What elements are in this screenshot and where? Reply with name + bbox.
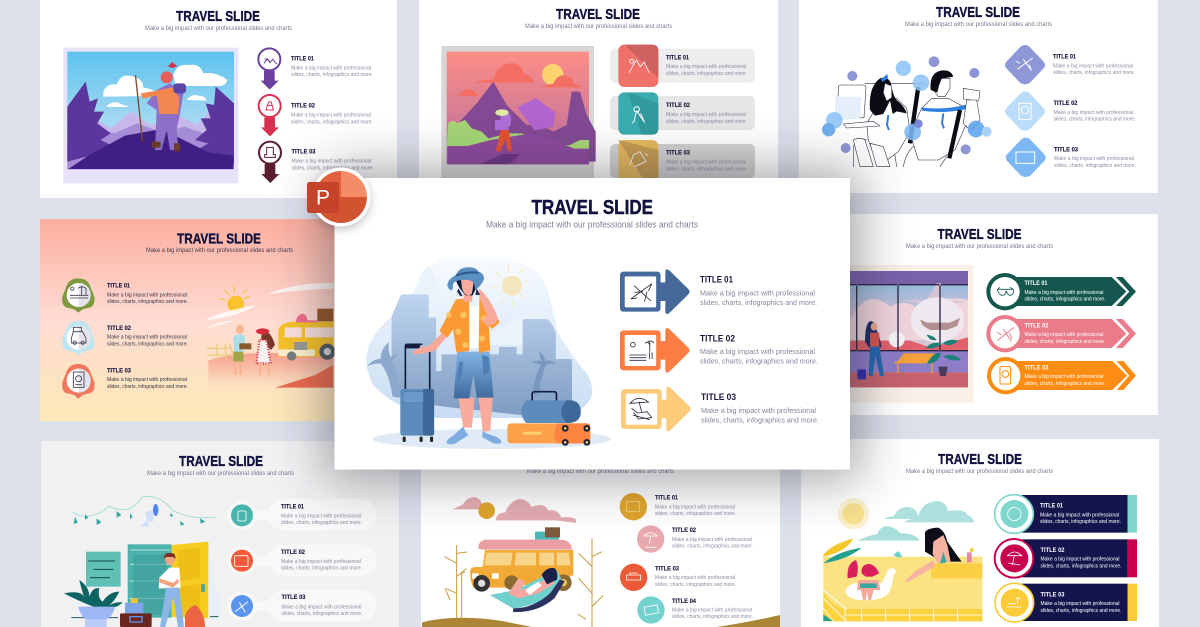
icons: arrow signs: [620, 269, 691, 431]
illustration: couple by van in the sun: [207, 283, 335, 388]
text: body 02: slides, charts, infographics and more.: [1054, 116, 1136, 122]
text: title 03: TITLE 03: [292, 148, 316, 156]
text: title 02: TITLE 02: [1024, 322, 1049, 330]
text: body 02: Make a big impact with professional: [666, 112, 746, 118]
subtitle: Make a big impact with our professional slides and charts: [146, 248, 293, 254]
heading: TRAVEL SLIDE: [556, 7, 640, 23]
text: body 01: [107, 292, 188, 305]
illustration: room with door, plant and person: [64, 496, 222, 627]
heading: TRAVEL SLIDE: [938, 227, 1022, 243]
text: body 03: [666, 160, 747, 172]
city skyline: [392, 294, 572, 415]
text: body 02: slides, charts, infographics and more.: [291, 120, 373, 126]
text: body 01: Make a big impact with professional: [1024, 290, 1104, 296]
ground shadow: [372, 429, 611, 449]
text: body 04: Make a big impact with professional: [672, 608, 752, 614]
text: title 02: TITLE 02: [672, 527, 696, 534]
text: body 01: slides, charts, infographics and more.: [291, 72, 373, 78]
text: title 01: TITLE 01: [666, 54, 689, 62]
text: title 01: TITLE 01: [655, 494, 678, 502]
text: body 02: [672, 537, 753, 550]
arrow banners: [986, 273, 1136, 394]
text: title 02: TITLE 02: [1040, 547, 1065, 554]
palm right: [531, 351, 557, 395]
text: body 02: [666, 112, 747, 125]
text: title 02: TITLE 02: [107, 325, 131, 332]
text: title 02: TITLE 02: [281, 549, 305, 556]
sun: [491, 265, 529, 307]
text: body 03: slides, charts, infographics and more.: [655, 582, 736, 588]
text: body 02: Make a big impact with professional: [281, 559, 361, 565]
illustration: airport window with plane: [843, 265, 973, 403]
text: title 01: TITLE 01: [281, 504, 304, 510]
subtitle: Make a big impact with our professional slides and charts: [905, 22, 1052, 28]
text: body 03: [1054, 156, 1136, 169]
text: body 03: slides, charts, infographics and more.: [1054, 163, 1136, 169]
main heading: TRAVEL SLIDE: [532, 197, 653, 219]
text: title 02: TITLE 02: [700, 334, 735, 344]
text: body 03: [282, 604, 362, 617]
text: body 03: [1024, 374, 1106, 387]
sign 2: beach: [620, 328, 690, 373]
text: body 03: [655, 575, 736, 588]
text: body 02: Make a big impact with professional: [1040, 556, 1120, 562]
sign 1: plane: [620, 269, 690, 314]
text: title 03: TITLE 03: [701, 392, 736, 402]
text: body 01: Make a big impact with professional: [700, 288, 815, 298]
heading: TRAVEL SLIDE: [936, 5, 1020, 21]
text: body 02: [700, 347, 818, 366]
text: body 01: [281, 514, 362, 526]
icon: PowerPoint logo: [307, 168, 370, 229]
illustration: van with sunbather and trees: [422, 497, 780, 627]
text: body 03: [107, 377, 188, 390]
illustration: walker with mountains and sunset: [441, 46, 596, 181]
text: title 01: TITLE 01: [1053, 54, 1076, 60]
text: body 01: [1024, 290, 1106, 302]
text: title 02: TITLE 02: [291, 102, 315, 110]
text: title 03: TITLE 03: [1024, 364, 1049, 372]
text: body 03: Make a big impact with professional: [701, 406, 816, 415]
text: title 03: TITLE 03: [1040, 592, 1065, 598]
illustration: hiker in purple mountains: [63, 48, 238, 183]
sign 3: umbrella: [621, 387, 691, 431]
text: body 02: [281, 559, 362, 572]
text: body 02: [107, 334, 188, 348]
text: body 03: [1040, 601, 1122, 614]
text: body 02: Make a big impact with professional: [1024, 332, 1104, 338]
text: body 01: slides, charts, infographics and more.: [1024, 296, 1106, 302]
text: body 03: slides, charts, infographics and more.: [666, 166, 747, 172]
text: body 01: Make a big impact with professional: [666, 64, 746, 70]
icon: PowerPoint logo: P: [316, 186, 330, 210]
main slide shadow: [325, 170, 860, 480]
illustration: pool with swimmers: [823, 498, 982, 622]
text: body 02: Make a big impact with professional: [107, 334, 187, 340]
panel: bottom-left slide: [41, 441, 399, 627]
text: body 01: [291, 66, 373, 78]
text: title 02: TITLE 02: [666, 102, 690, 109]
text: body 01: slides, charts, infographics and more.: [700, 298, 817, 307]
text: body 03: slides, charts, infographics and more.: [282, 611, 362, 617]
text: body 01: Make a big impact with professional: [281, 514, 361, 520]
text: body 03: [701, 406, 819, 424]
text: body 02: [1040, 556, 1122, 570]
text: title 03: TITLE 03: [282, 594, 306, 601]
list: circle arrow icons: [258, 48, 281, 183]
panel: main centre slide: [334, 178, 850, 470]
text: body 01: [1053, 64, 1135, 76]
text: title 01: TITLE 01: [700, 274, 733, 284]
text: body 02: slides, charts, infographics and more.: [1040, 564, 1122, 570]
text: title 01: TITLE 01: [291, 56, 314, 62]
text: body 03: Make a big impact with professional: [655, 575, 735, 581]
subtitle: Make a big impact with our professional slides and charts: [906, 469, 1053, 475]
text: body 03: slides, charts, infographics and more.: [1024, 381, 1106, 387]
list: navy bars with ring circles: [995, 495, 1137, 622]
text: body 01: slides, charts, infographics and more.: [281, 520, 362, 526]
text: body 01: [666, 64, 747, 77]
text: body 03: slides, charts, infographics and more.: [107, 384, 188, 390]
text: body 02: Make a big impact with professional: [291, 112, 371, 118]
panel: middle-right slide: [843, 214, 1158, 415]
text: body 01: slides, charts, infographics and more.: [1053, 70, 1135, 76]
text: body 04: [672, 608, 753, 620]
text: body 01: slides, charts, infographics and more.: [1040, 519, 1121, 525]
text: body 03: Make a big impact with professional: [1024, 374, 1104, 380]
text: body 03: slides, charts, infographics and more.: [1040, 608, 1122, 614]
text: body 02: slides, charts, infographics and more.: [1024, 339, 1106, 345]
text: body 02: slides, charts, infographics and more.: [107, 342, 188, 348]
text: body 02: slides, charts, infographics and more.: [672, 544, 753, 550]
text: body 03: Make a big impact with professional: [1040, 601, 1120, 607]
text: body 03: slides, charts, infographics and more.: [292, 166, 374, 172]
text: title 04: TITLE 04: [672, 598, 696, 605]
text: body 01: slides, charts, infographics and more.: [666, 71, 747, 77]
illustration: traveller with luggage and city: [366, 256, 611, 449]
duffel bag: [521, 392, 581, 423]
heading: TRAVEL SLIDE: [177, 232, 261, 248]
subtitle: Make a big impact with our professional slides and charts: [145, 26, 292, 32]
text: title 03: TITLE 03: [666, 150, 690, 156]
text: body 03: Make a big impact with professional: [107, 377, 187, 383]
text: title 01: TITLE 01: [1040, 502, 1063, 510]
person: [412, 267, 502, 444]
text: body 02: [291, 112, 373, 126]
text: body 01: slides, charts, infographics and more.: [655, 511, 736, 517]
panel: top-middle slide: [419, 0, 778, 182]
panel: top-right slide: [799, 0, 1158, 193]
text: title 03: TITLE 03: [655, 566, 679, 572]
icon pins: [62, 278, 95, 399]
text: title 01: TITLE 01: [1024, 280, 1048, 287]
panel: middle-left slide: [40, 219, 340, 421]
text: body 03: Make a big impact with professional: [666, 160, 746, 166]
panel: bottom-right slide: [801, 439, 1159, 627]
main subtitle: Make a big impact with our professional slides and charts: [486, 220, 698, 230]
text: body 01: [700, 288, 817, 307]
text: body 01: Make a big impact with professional: [107, 292, 187, 298]
icon diamonds: [1005, 45, 1046, 177]
text: body 03: Make a big impact with professional: [292, 158, 372, 164]
text: body 02: slides, charts, infographics and more.: [281, 566, 362, 572]
text: body 03: slides, charts, infographics and more.: [701, 416, 819, 424]
text: body 02: [1054, 110, 1136, 122]
heading: TRAVEL SLIDE: [179, 454, 263, 470]
list: four circles: [620, 493, 665, 624]
text: body 01: Make a big impact with professional: [1053, 64, 1133, 70]
text: body 03: Make a big impact with professional: [1054, 156, 1134, 162]
heading: TRAVEL SLIDE: [176, 9, 260, 25]
clouds: [418, 265, 556, 345]
text: body 01: Make a big impact with professional: [655, 504, 735, 510]
text: body 02: slides, charts, infographics and more.: [666, 119, 747, 125]
text: body 01: [1040, 512, 1121, 525]
panel: bottom-middle slide: [421, 450, 780, 627]
palm left: [367, 342, 400, 398]
subtitle: Make a big impact with our professional slides and charts: [147, 471, 294, 477]
heading: TRAVEL SLIDE: [938, 452, 1022, 468]
text: body 03: Make a big impact with professional: [282, 604, 362, 610]
suitcase blue: [400, 344, 434, 442]
icon pills: [227, 499, 377, 621]
text: body 02: Make a big impact with professional: [700, 347, 815, 356]
text: body 01: slides, charts, infographics and more.: [107, 299, 188, 305]
text: body 01: [655, 504, 736, 517]
blob background: [366, 256, 592, 418]
text: title 03: TITLE 03: [1054, 146, 1078, 154]
text: title 01: TITLE 01: [107, 282, 130, 290]
orange suitcase: [507, 423, 590, 446]
text: body 02: slides, charts, infographics and more.: [700, 356, 818, 366]
subtitle: Make a big impact with our professional slides and charts: [525, 24, 672, 30]
subtitle: Make a big impact with our professional slides and charts: [906, 244, 1053, 250]
illustration: couple on a plane, line art: [822, 56, 992, 167]
text: body 01: Make a big impact with professional: [291, 66, 371, 72]
text: title 02: TITLE 02: [1054, 100, 1078, 107]
text: body 03: [292, 158, 374, 172]
text: body 02: Make a big impact with professional: [672, 537, 752, 543]
text: body 04: slides, charts, infographics and more.: [672, 614, 753, 620]
text: title 03: TITLE 03: [107, 368, 131, 374]
text: body 02: Make a big impact with professional: [1054, 110, 1134, 116]
subtitle: Make a big impact with our professional slides and charts: [527, 469, 674, 475]
text: body 02: [1024, 332, 1106, 345]
text: body 01: Make a big impact with professional: [1040, 512, 1119, 518]
panel: top-left slide: [40, 0, 397, 198]
cards: three rows: [610, 45, 755, 182]
